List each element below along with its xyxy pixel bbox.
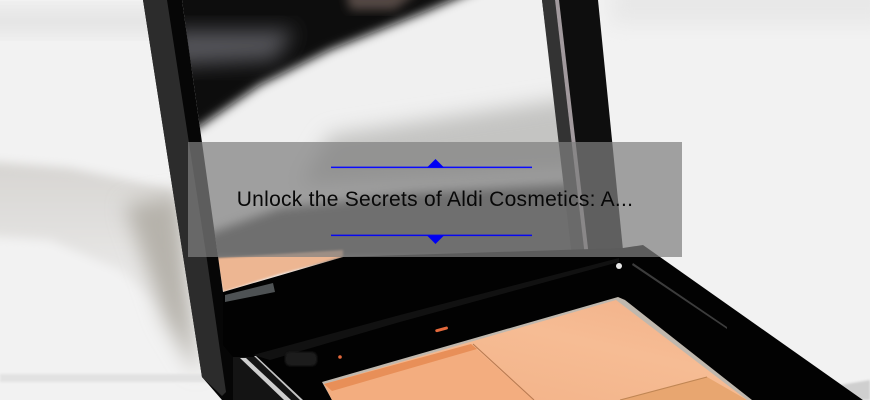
title: Unlock the Secrets of Aldi Cosmetics: A... — [237, 188, 633, 211]
compact lid frame: right — [542, 0, 623, 257]
top divider with diamond — [331, 159, 532, 168]
powder pan with blush shades — [322, 297, 752, 400]
mirror reflection — [182, 0, 572, 292]
compact lid frame: left — [143, 0, 242, 400]
translucent title panel — [188, 142, 682, 257]
white hinge dot — [616, 263, 622, 269]
compact base — [223, 245, 870, 400]
bottom divider with diamond — [331, 235, 532, 244]
